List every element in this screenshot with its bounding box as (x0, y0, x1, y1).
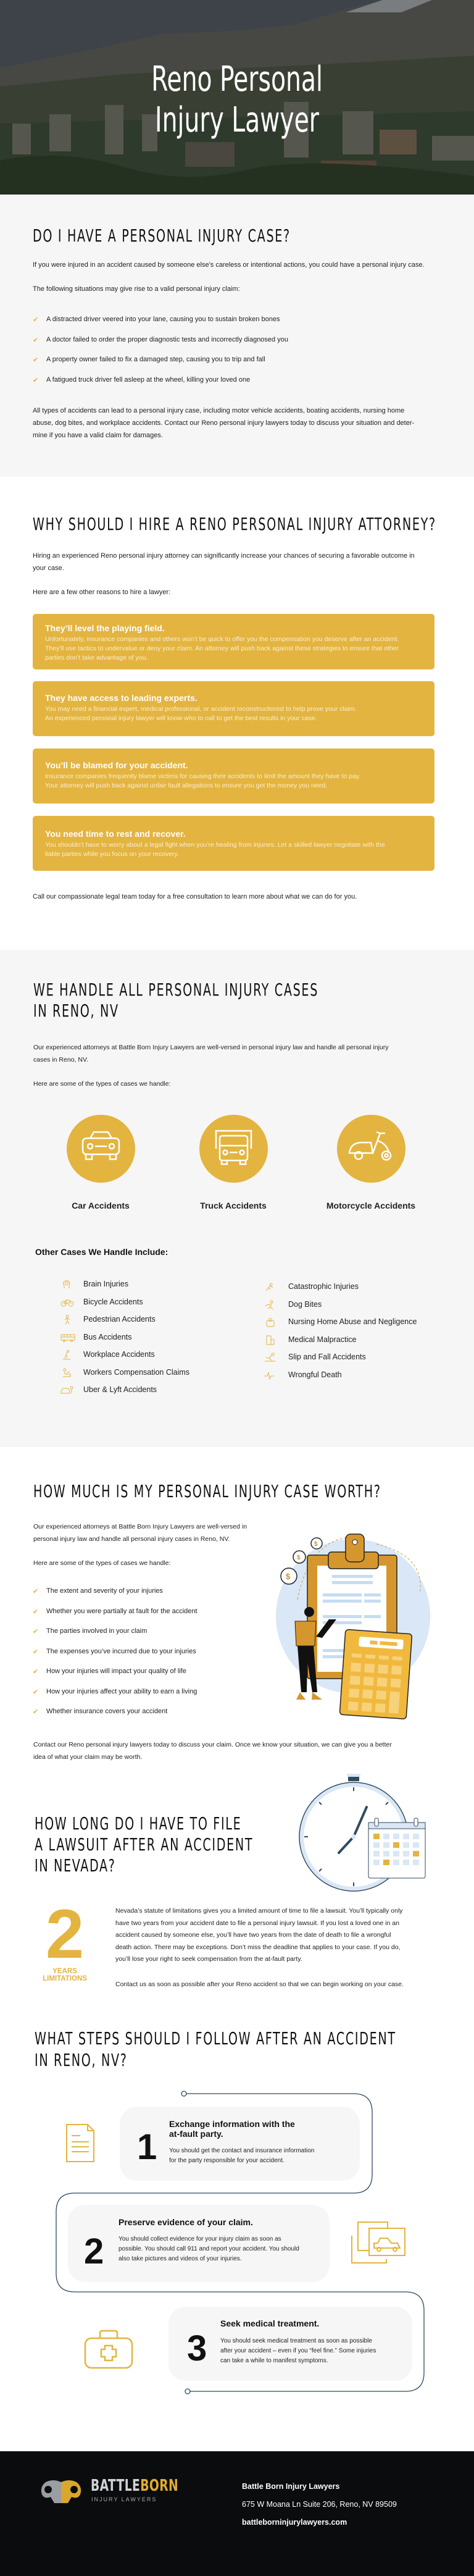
text: statute: have two years from your accident date to file a personal injury lawsuit. If you lost a loved one in an (115, 1919, 399, 1927)
step 2: You should collect evidence for your injury claim as soon as (118, 2236, 281, 2242)
intro text: Our experienced attorneys at Battle Born Injury Lawyers are well-versed in personal injury law and handle all personal injury (33, 1044, 388, 1051)
step 2 (68, 2205, 330, 2282)
heading: IN RENO, NV (33, 1001, 119, 1021)
reason box 2: An experienced personal injury lawyer will know who to call to get the best results in your case. (45, 715, 317, 722)
label: car: Car Accidents (72, 1201, 130, 1210)
section: we handle: Here are some of the types of cases we handle: (33, 1080, 170, 1088)
reason box 1: They’ll use tactics to undervalue or deny your claim. An attorney will push back against these strategies to ensure that other (45, 645, 399, 652)
heading: WE HANDLE ALL PERSONAL INJURY CASES (33, 980, 318, 1000)
list: right column: Wrongful Death (288, 1370, 342, 1379)
text: call: Call our compassionate legal team today for a free consultation to learn more about what we can do for you. (33, 893, 357, 900)
label: truck: Truck Accidents (200, 1201, 267, 1210)
heading: how long: IN NEVADA? (35, 1855, 116, 1876)
reason box 3: You’ll be blamed for your accident. (45, 760, 188, 770)
illustration: clock and calendar (299, 1774, 426, 1892)
reason box 4: liable parties while you focus on your recovery. (45, 850, 179, 858)
timeline connector (56, 2091, 425, 2394)
illustration: clipboard and calculator: $ (297, 1554, 301, 1561)
list: left column: Bicycle Accidents (83, 1298, 143, 1306)
step 2: also take pictures and videos of your injuries. (118, 2255, 242, 2262)
intro text (33, 1044, 389, 1064)
contact info: battleborninjurylawyers.com (242, 2518, 347, 2527)
contact info: 675 W Moana Ln Suite 206, Reno, NV 89509 (242, 2500, 397, 2509)
heading: how long (35, 1813, 253, 1876)
logo (41, 2477, 178, 2503)
stat: 2 years limitations: LIMITATIONS (43, 1975, 87, 1982)
text: why intro: Hiring an experienced Reno personal injury attorney can significantly increase your chances of securing a favorable outcome in (33, 552, 415, 560)
checklist: factors: How your injuries affect your ability to earn a living (46, 1688, 197, 1695)
hero title (151, 59, 323, 140)
step 1: for the party responsible for your accident. (169, 2157, 285, 2164)
illustration: clipboard and calculator: $ (286, 1572, 291, 1581)
step 3: 3 (187, 2328, 207, 2368)
reason box 2: They have access to leading experts. (45, 693, 198, 703)
text: Here are a few other reasons to hire a lawyer: (33, 589, 170, 596)
step 1 (120, 2107, 360, 2181)
section: do I have a case (0, 195, 474, 477)
icon: medical kit (84, 2330, 133, 2369)
reason box 4: You need time to rest and recover. (45, 829, 186, 839)
footer (0, 2451, 474, 2576)
label: motorcycle: Motorcycle Accidents (326, 1201, 415, 1210)
checklist: factors: The expenses you’ve incurred due to your injuries (46, 1648, 196, 1655)
step 3: after your accident – even if you “feel fine.” Some injuries (220, 2347, 376, 2354)
text: contact: idea of what your claim may be worth. (33, 1753, 142, 1761)
hero title: Reno Personal (151, 59, 323, 99)
checklist: factors (33, 1587, 198, 1715)
text: Contact us as soon as possible after your Reno accident so that we can begin working on your case. (115, 1981, 404, 1988)
list: right column: Dog Bites (288, 1300, 322, 1309)
checklist: A doctor failed to order the proper diagnostic tests and incorrectly diagnosed you (46, 336, 288, 343)
heading: how long: HOW LONG DO I HAVE TO FILE (35, 1813, 241, 1834)
reason box 3: Insurance companies frequently blame victims for causing their accidents to limit the amount they have to pay. (45, 773, 360, 780)
illustration: clipboard and calculator: $ (314, 1541, 318, 1548)
closing text: abuse, dog bites, and workplace accidents. Contact our Reno personal injury lawyers today to discuss your situation and deter- (33, 419, 414, 427)
reason box 4 (33, 816, 434, 871)
icon: document (66, 2124, 94, 2162)
list: left column: Pedestrian Accidents (83, 1315, 156, 1324)
intro text: If you were injured in an accident caused by someone else’s careless or intentional actions, you could have a personal injury case. (33, 261, 425, 269)
list: left column: Workplace Accidents (83, 1350, 155, 1359)
heading: case worth: HOW MUCH IS MY PERSONAL INJURY CASE WORTH? (33, 1481, 381, 1501)
text: contact: Contact our Reno personal injury lawyers today to discuss your claim. Once we know your situation, we can give you a better (33, 1741, 392, 1748)
step 3 (168, 2307, 412, 2381)
reason box 1: They’ll level the playing field. (45, 623, 165, 633)
heading: steps (35, 2028, 396, 2070)
step 1: 1 (137, 2127, 157, 2167)
icon: truck (199, 1115, 268, 1183)
stat: 2 years limitations: 2 (46, 1895, 84, 1973)
text: why intro (33, 552, 415, 572)
list: right column: Catastrophic Injuries (288, 1282, 359, 1291)
list: right column: Slip and Fall Accidents (288, 1353, 366, 1361)
text: statute: you’ll lose your right to seek compensation from the at-fault party. (115, 1955, 302, 1963)
reason box 1: Unfortunately, insurance companies and others won’t be quick to offer you the compensation you deserve after an accident. (45, 636, 399, 643)
checklist: A property owner failed to fix a damaged step, causing you to trip and fall (46, 356, 265, 363)
text: statute: accident caused by someone else, you’ll have two years from the date of death to file a wrongful (115, 1931, 391, 1939)
reason box 1 (33, 614, 434, 669)
text: why intro: your case. (33, 564, 64, 572)
list: left column: Uber & Lyft Accidents (83, 1385, 157, 1394)
step 3: can take a while to manifest symptoms. (220, 2357, 328, 2364)
checklist: factors: The extent and severity of your injuries (46, 1587, 163, 1595)
subheading: other cases: Other Cases We Handle Include: (35, 1247, 168, 1257)
list: left column: Brain Injuries (83, 1280, 128, 1288)
heading (33, 980, 318, 1021)
heading: steps: IN RENO, NV? (35, 2050, 128, 2070)
reason box 3: Your attorney will push back against unfair fault allegations to ensure you get the money you need. (45, 782, 327, 789)
icon: car (67, 1115, 135, 1183)
reason box 2: You may need a financial expert, medical professional, or accident reconstructionist to help prove your claim. (45, 705, 356, 713)
closing text: mine if you have a valid claim for damages. (33, 432, 163, 439)
reason box 1: parties don’t take advantage of you. (45, 654, 148, 661)
list: left column (60, 1280, 189, 1394)
text: statute: Nevada’s statute of limitations gives you a limited amount of time to file a lawsuit. You’ll typically only (115, 1907, 403, 1915)
list: right column: Medical Malpractice (288, 1335, 356, 1344)
list: left column: Workers Compensation Claims (83, 1368, 189, 1377)
text: worth intro (33, 1523, 247, 1543)
closing text (33, 407, 414, 439)
step 3: You should seek medical treatment as soon as possible (220, 2338, 372, 2344)
step 2: 2 (84, 2231, 104, 2272)
hero banner (0, 0, 474, 195)
step 1: Exchange information with the (169, 2119, 295, 2129)
list: left column: Bus Accidents (83, 1333, 132, 1341)
contact info: Battle Born Injury Lawyers (242, 2482, 339, 2491)
step 1: You should get the contact and insurance information (169, 2147, 314, 2154)
reason box 2 (33, 681, 434, 736)
reason box 4: You shouldn’t have to worry about a legal fight when you’re healing from injuries. Let a skilled lawyer negotiate with the (45, 841, 385, 849)
reason box 3 (33, 749, 434, 803)
heading: why hire: WHY SHOULD I HIRE A RENO PERSONAL INJURY ATTORNEY? (33, 514, 436, 534)
section: we handle (0, 950, 474, 1447)
icon: motorcycle (337, 1115, 405, 1183)
text: statute (115, 1907, 403, 1963)
heading: steps: WHAT STEPS SHOULD I FOLLOW AFTER AN ACCIDENT (35, 2028, 396, 2049)
logo: INJURY LAWYERS (91, 2496, 157, 2503)
checklist: factors: Whether you were partially at fault for the accident (46, 1608, 198, 1615)
heading: DO I HAVE A PERSONAL INJURY CASE? (33, 225, 291, 246)
heading: how long: A LAWSUIT AFTER AN ACCIDENT (35, 1834, 253, 1855)
checklist: factors: Whether insurance covers your accident (46, 1708, 167, 1715)
intro text: cases in Reno, NV. (33, 1056, 88, 1064)
text: worth intro: Our experienced attorneys at Battle Born Injury Lawyers are well-versed in (33, 1523, 247, 1530)
text: contact (33, 1741, 392, 1761)
checklist: A fatigued truck driver fell asleep at the wheel, killing your loved one (46, 376, 250, 384)
step 2: Preserve evidence of your claim. (118, 2217, 253, 2227)
hero title: Injury Lawyer (155, 100, 319, 140)
step 2: possible. You should call 911 and report your accident. You should (118, 2246, 299, 2252)
text: worth intro: personal injury law and handle all personal injury cases in Reno, NV. (33, 1535, 230, 1543)
illustration: clipboard and calculator (276, 1533, 430, 1719)
checklist: A distracted driver veered into your lane, causing you to sustain broken bones (46, 316, 280, 323)
icon: photos (351, 2221, 405, 2263)
text: statute: death action. There may be exceptions. Don’t miss the deadline that applies to your case. If you do, (115, 1944, 400, 1951)
list: right column: Nursing Home Abuse and Negligence (288, 1317, 417, 1326)
text: Here are some of the types of cases we handle: (33, 1559, 170, 1567)
checklist: factors: How your injuries will impact your quality of life (46, 1668, 186, 1675)
checklist: factors: The parties involved in your claim (46, 1627, 147, 1635)
list: right column (264, 1282, 417, 1380)
stat: 2 years limitations: YEARS (52, 1968, 77, 1975)
contact info (242, 2482, 397, 2527)
logo: BATTLEBORN (91, 2477, 178, 2495)
checklist (33, 316, 288, 384)
section: do I have a case: The following situations may give rise to a valid personal injury claim: (33, 285, 240, 293)
step 1: at-fault party. (169, 2129, 223, 2139)
step 3: Seek medical treatment. (220, 2318, 319, 2328)
closing text: All types of accidents can lead to a personal injury case, including motor vehicle accidents, boating accidents, nursing home (33, 407, 404, 414)
